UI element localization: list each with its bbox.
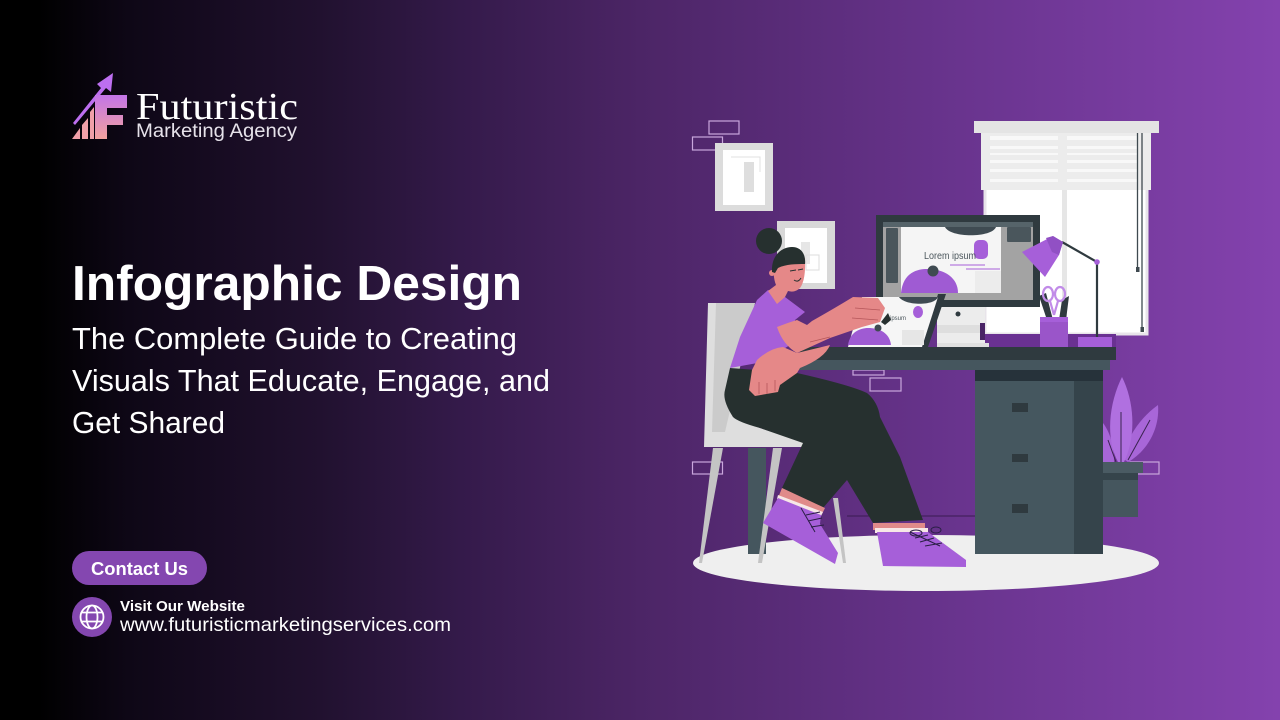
- arm on lap: [749, 345, 830, 396]
- pen cup with scissors: [1039, 287, 1069, 347]
- person: [724, 228, 966, 567]
- logo wordmark: Futuristic: [136, 86, 298, 128]
- trousers: [724, 368, 923, 523]
- tablet text: ipsum: [890, 316, 906, 322]
- wall frame: lower: [777, 221, 835, 289]
- outline rectangles: [692, 121, 1159, 474]
- hair: [772, 247, 805, 273]
- arm on tablet: [777, 297, 885, 353]
- button: contact us: Contact Us: [91, 559, 188, 579]
- website text: www.futuristicmarketingservices.com: [119, 614, 451, 636]
- bun: [756, 228, 782, 254]
- floor ellipse: [693, 535, 1159, 591]
- back shoe: [763, 488, 838, 564]
- desk: [748, 347, 1116, 554]
- drawer cabinet: [975, 370, 1103, 554]
- subtitle: [72, 321, 550, 440]
- logo wordmark: Marketing Agency: [136, 121, 298, 142]
- screen text: Lorem ipsum: [924, 251, 976, 262]
- window: [974, 121, 1159, 334]
- plant: [1103, 377, 1158, 517]
- button: contact us: [72, 551, 207, 585]
- wall frame: upper: [715, 143, 773, 211]
- illustration: designer at desk: [692, 121, 1159, 591]
- tablet: [848, 294, 946, 347]
- title: Infographic Design: [72, 257, 522, 311]
- website text: [119, 599, 451, 636]
- subtitle: Get Shared: [72, 405, 225, 440]
- website text: Visit Our Website: [120, 599, 245, 615]
- website contact: [72, 597, 451, 637]
- neck and face: [768, 258, 805, 304]
- shirt: [730, 290, 805, 368]
- icon: globe: [72, 597, 112, 637]
- logo: [72, 73, 298, 142]
- stylus: [881, 313, 891, 325]
- icon: logo mark: [72, 73, 127, 139]
- logo wordmark: [136, 86, 298, 142]
- lamp: [1022, 236, 1112, 348]
- wall shadow: [985, 334, 1116, 348]
- front shoe: [873, 523, 966, 567]
- monitor: [876, 215, 1040, 348]
- subtitle: The Complete Guide to Creating: [72, 321, 517, 356]
- subtitle: Visuals That Educate, Engage, and: [72, 363, 550, 398]
- chair: [699, 303, 846, 563]
